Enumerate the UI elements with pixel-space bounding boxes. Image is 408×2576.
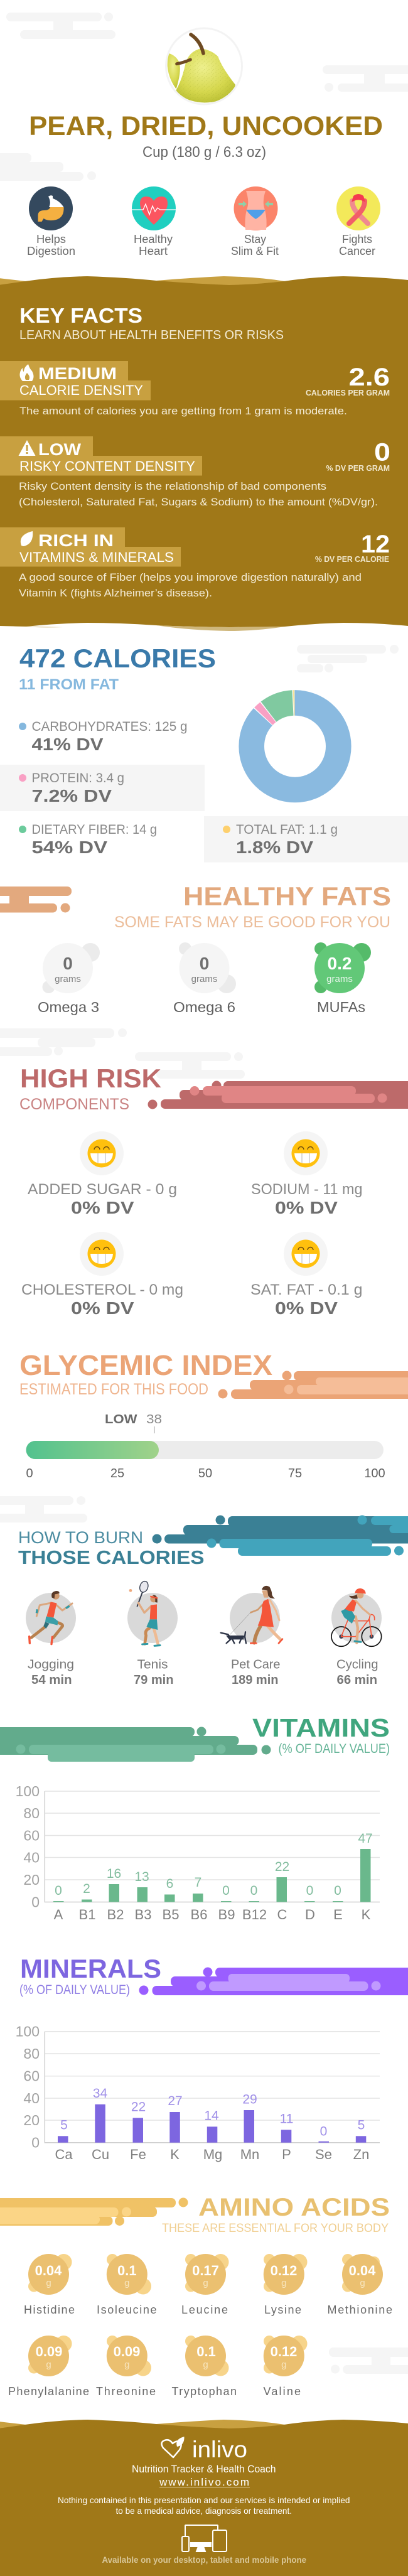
fact: risky content density <box>0 436 390 508</box>
legend: protein: 7.2% DV <box>31 786 112 806</box>
bar chart: minerals: P <box>282 2147 291 2162</box>
risk item: added sugar <box>28 1131 177 1217</box>
subheading: calories from fat: 11 FROM FAT <box>19 676 119 693</box>
background cloud: left <box>0 153 96 181</box>
logo: inlivo <box>161 2437 247 2462</box>
risk item: saturated fat <box>250 1232 363 1318</box>
availability note: Available on your desktop, tablet and mobile phone <box>102 2555 306 2565</box>
bar chart: minerals: 60 <box>23 2068 40 2084</box>
bar chart: minerals <box>16 2024 380 2162</box>
amino acid: valine: g <box>281 2359 286 2370</box>
activity: pet care: 189 min <box>232 1673 279 1687</box>
amino acid: isoleucine: Isoleucine <box>97 2304 157 2316</box>
fact: calorie density: 2.6 <box>349 364 390 391</box>
amino acid: histidine: g <box>46 2278 51 2288</box>
subheading: amino acids: THESE ARE ESSENTIAL FOR YOUR BODY <box>162 2222 389 2235</box>
healthy fat: omega 6 <box>173 942 236 1015</box>
decorative blob: amino acids <box>0 2197 188 2226</box>
bar chart: vitamins: B6 <box>191 1907 207 1922</box>
amino acid: valine: 0.12 <box>271 2344 297 2359</box>
bar chart: vitamins: B5 <box>163 1907 179 1922</box>
bar chart: vitamins: C <box>277 1907 287 1922</box>
fact: rich in vitamins and minerals <box>0 527 390 599</box>
benefit: stay slim and fit <box>231 186 279 257</box>
healthy fat: omega 6: 0 <box>200 954 209 973</box>
food photo: pear <box>166 28 242 104</box>
bar chart: vitamins: E <box>333 1907 343 1922</box>
bar chart: vitamins: 60 <box>23 1827 40 1843</box>
amino acid: threonine: 0.09 <box>114 2344 140 2359</box>
legend: carbohydrates: CARBOHYDRATES: 125 g <box>31 719 187 734</box>
heading: how to burn: HOW TO BURN <box>18 1528 143 1547</box>
activity: jogging: Jogging <box>28 1657 74 1671</box>
legend: total fat <box>204 816 408 863</box>
benefit: stay slim and fit: Stay <box>244 233 266 245</box>
amino acid: methionine: Methionine <box>328 2304 392 2316</box>
bar chart: minerals: 29 <box>242 2093 257 2107</box>
activity: cycling: 66 min <box>336 1673 377 1687</box>
amino acid: methionine: g <box>360 2278 365 2288</box>
bar chart: vitamins: 0 <box>306 1883 313 1898</box>
bar chart: minerals: Zn <box>353 2147 369 2162</box>
decorative blob: vitamins <box>0 1727 271 1762</box>
amino acid: tryptophan: g <box>203 2359 208 2370</box>
bar chart: minerals: 0 <box>31 2135 40 2151</box>
bar chart: minerals: 11 <box>280 2112 293 2126</box>
gauge: glycemic index: 50 <box>198 1467 212 1480</box>
benefit: healthy heart: Heart <box>139 245 168 257</box>
bar chart: vitamins: 0 <box>222 1883 230 1898</box>
amino acid: leucine: 0.17 <box>192 2263 219 2278</box>
amino acid: histidine: Histidine <box>24 2304 75 2316</box>
amino acid: lysine: g <box>281 2278 286 2288</box>
decorative blob: high risk <box>148 1081 408 1109</box>
benefit: fights cancer: Fights <box>342 233 372 245</box>
subheading: minerals: (% OF DAILY VALUE) <box>19 1983 130 1997</box>
activity: pet care <box>221 1586 282 1687</box>
panel: footer <box>0 2420 408 2576</box>
fact: calorie density: MEDIUM <box>38 364 117 383</box>
fact: calorie density: The amount of calories you are getting from 1 gram is moderate. <box>19 405 347 417</box>
heading: key facts: KEY FACTS <box>19 304 142 327</box>
fact: rich in vitamins and minerals: Vitamin K (fights Alzheimer’s disease). <box>19 587 212 599</box>
subheading: key facts: LEARN ABOUT HEALTH BENEFITS OR RISKS <box>19 328 284 342</box>
legend: protein <box>0 765 205 811</box>
bar chart: minerals: 34 <box>93 2086 107 2101</box>
icon: devices <box>182 2525 227 2552</box>
subheading: glycemic index: ESTIMATED FOR THIS FOOD <box>19 1381 208 1398</box>
background cloud: top right <box>323 65 408 92</box>
gauge: glycemic index: 100 <box>364 1467 385 1480</box>
gauge: glycemic index: 0 <box>26 1467 33 1480</box>
amino acid: leucine <box>181 2254 228 2316</box>
healthy fat: omega 3: grams <box>55 974 81 984</box>
healthy fat: omega 3: Omega 3 <box>38 999 99 1015</box>
amino acid: isoleucine: g <box>124 2278 129 2288</box>
risk item: cholesterol <box>21 1232 183 1318</box>
fact: calorie density: CALORIES PER GRAM <box>306 388 390 397</box>
amino acid: lysine <box>264 2254 308 2316</box>
healthy fat: MUFAs: 0.2 <box>328 954 352 973</box>
background cloud: high risk left <box>0 1028 127 1056</box>
bar chart: minerals: 20 <box>23 2112 40 2128</box>
subheading: healthy fats: SOME FATS MAY BE GOOD FOR YOU <box>114 913 390 931</box>
donut chart: calorie sources <box>252 703 338 790</box>
heading: glycemic index: GLYCEMIC INDEX <box>19 1349 272 1381</box>
fact: risky content density: 0 <box>374 438 390 466</box>
benefit: fights cancer <box>336 186 380 257</box>
bar chart: minerals: Mn <box>240 2147 259 2162</box>
activity: pet care: Pet Care <box>231 1657 280 1671</box>
activity: tennis: Tenis <box>137 1657 168 1671</box>
title: PEAR, DRIED, UNCOOKED <box>29 111 383 141</box>
amino acid: lysine: 0.12 <box>271 2263 297 2278</box>
heading: minerals: MINERALS <box>20 1954 161 1983</box>
bar chart: minerals: 5 <box>358 2118 365 2133</box>
healthy fat: omega 6: grams <box>191 974 217 984</box>
background cloud: bottom right <box>329 2347 408 2374</box>
bar chart: vitamins: 22 <box>275 1860 289 1874</box>
gauge: glycemic index <box>26 1413 385 1480</box>
bar chart: vitamins: B3 <box>135 1907 151 1922</box>
activity: cycling: Cycling <box>336 1657 378 1671</box>
heading: amino acids: AMINO ACIDS <box>198 2194 390 2221</box>
bar chart: vitamins: 80 <box>23 1805 40 1821</box>
logo: inlivo: inlivo <box>192 2437 247 2462</box>
bar chart: vitamins: 7 <box>195 1875 201 1890</box>
bar chart: minerals: Mg <box>203 2147 222 2162</box>
benefit: healthy heart: Healthy <box>134 233 173 245</box>
fact: calorie density <box>0 361 390 417</box>
serving size: Cup (180 g / 6.3 oz) <box>142 144 266 161</box>
risk item: sodium: 0% DV <box>275 1198 338 1217</box>
healthy fat: omega 3: 0 <box>63 954 73 973</box>
benefit: healthy heart <box>132 186 176 257</box>
heading: healthy fats: HEALTHY FATS <box>183 881 391 911</box>
bar chart: minerals: 0 <box>320 2125 327 2139</box>
bar chart: minerals: 80 <box>23 2045 40 2062</box>
risk item: saturated fat: 0% DV <box>275 1298 338 1318</box>
bar chart: vitamins: 0 <box>334 1883 341 1898</box>
risk item: saturated fat: SAT. FAT - 0.1 g <box>250 1281 363 1298</box>
activity: tennis: 79 min <box>134 1673 173 1687</box>
panel: key facts <box>0 276 408 631</box>
activity: tennis <box>127 1580 178 1687</box>
benefit: stay slim and fit: Slim & Fit <box>231 245 279 257</box>
bar chart: vitamins: 0 <box>55 1883 62 1898</box>
background cloud: calories <box>297 645 399 672</box>
bar chart: vitamins: B12 <box>242 1907 267 1922</box>
amino acid: tryptophan: Tryptophan <box>172 2385 237 2398</box>
heading: those calories: THOSE CALORIES <box>18 1546 205 1568</box>
fact: risky content density: LOW <box>38 440 82 459</box>
amino acid: isoleucine <box>97 2254 157 2316</box>
amino acid: threonine: g <box>124 2359 129 2370</box>
bar chart: vitamins: B2 <box>107 1907 124 1922</box>
activity: cycling <box>331 1588 382 1687</box>
decorative blob: burn <box>152 1516 408 1556</box>
bar chart: vitamins: B9 <box>218 1907 235 1922</box>
bar chart: vitamins: 0 <box>250 1883 257 1898</box>
risk item: sodium: SODIUM - 11 mg <box>251 1181 363 1198</box>
amino acid: valine: Valine <box>264 2385 301 2398</box>
benefit: helps digestion: Helps <box>36 233 66 245</box>
fact: rich in vitamins and minerals: 12 <box>361 531 390 558</box>
amino acid: leucine: g <box>203 2278 208 2288</box>
healthy fat: omega 6: Omega 6 <box>173 999 235 1015</box>
background cloud: burn <box>0 1496 87 1522</box>
bar chart: minerals: 14 <box>204 2109 219 2123</box>
legend: dietary fiber: DIETARY FIBER: 14 g <box>31 822 157 837</box>
amino acid: phenylalanine <box>8 2336 89 2398</box>
heading: vitamins: VITAMINS <box>252 1713 390 1742</box>
healthy fat: MUFAs: grams <box>326 974 353 984</box>
amino acid: histidine <box>24 2254 75 2316</box>
background cloud: high risk centre <box>135 1052 245 1079</box>
bar chart: minerals: Se <box>315 2147 332 2162</box>
bar chart: vitamins: 40 <box>23 1850 40 1866</box>
bar chart: vitamins: 0 <box>31 1894 40 1910</box>
amino acid: tryptophan <box>172 2336 237 2398</box>
amino acid: phenylalanine: Phenylalanine <box>8 2385 89 2398</box>
background cloud: top left <box>6 13 115 39</box>
bar chart: minerals: Cu <box>92 2147 109 2162</box>
amino acid: threonine <box>96 2336 156 2398</box>
benefit: helps digestion: Digestion <box>27 245 75 257</box>
amino acid: lysine: Lysine <box>264 2304 301 2316</box>
fact: rich in vitamins and minerals: % DV PER CALORIE <box>315 554 389 564</box>
bar chart: vitamins: 20 <box>23 1872 40 1888</box>
fact: rich in vitamins and minerals: RICH IN <box>38 531 114 550</box>
amino acid: tryptophan: 0.1 <box>196 2344 216 2359</box>
fact: risky content density: (Cholesterol, Saturated Fat, Sugars & Sodium) to the amount (%DV/gr). <box>19 496 378 508</box>
bar chart: minerals: Ca <box>55 2147 73 2162</box>
amino acid: leucine: Leucine <box>181 2304 228 2316</box>
gauge: glycemic index: 75 <box>288 1467 302 1480</box>
gauge: glycemic index: 38 <box>146 1413 162 1426</box>
risk item: added sugar: ADDED SUGAR - 0 g <box>28 1181 177 1198</box>
amino acid: threonine: Threonine <box>96 2385 156 2398</box>
bar chart: minerals: 100 <box>16 2024 40 2040</box>
bar chart: vitamins: 16 <box>107 1867 121 1881</box>
fact: risky content density: Risky Content density is the relationship of bad components <box>19 480 326 492</box>
bar chart: vitamins: D <box>305 1907 315 1922</box>
decorative blob: healthy fats <box>0 887 72 913</box>
decorative blob: minerals <box>139 1968 408 1995</box>
fact: rich in vitamins and minerals: A good source of Fiber (helps you improve digestion naturally) and <box>19 571 362 583</box>
gauge: glycemic index: LOW <box>105 1413 137 1426</box>
tagline: Nutrition Tracker & Health Coach <box>132 2463 276 2475</box>
legend: carbohydrates: 41% DV <box>31 735 104 754</box>
bar chart: vitamins: 100 <box>16 1783 40 1799</box>
bar chart: vitamins: 6 <box>166 1877 173 1891</box>
risk item: added sugar: 0% DV <box>71 1198 134 1217</box>
risk item: cholesterol: 0% DV <box>71 1298 134 1318</box>
benefit: helps digestion <box>27 186 75 257</box>
bar chart: minerals: 5 <box>60 2118 68 2133</box>
risk item: sodium <box>251 1131 363 1217</box>
heading: high risk: HIGH RISK <box>20 1064 161 1093</box>
bar chart: vitamins: 47 <box>358 1831 373 1846</box>
healthy fat: omega 3 <box>38 943 100 1015</box>
healthy fat: MUFAs <box>314 942 371 1015</box>
activity: jogging <box>26 1591 76 1687</box>
subheading: vitamins: (% OF DAILY VALUE) <box>279 1742 390 1756</box>
amino acid: methionine: 0.04 <box>349 2263 376 2278</box>
bar chart: minerals: 40 <box>23 2090 40 2106</box>
fact: risky content density: % DV PER GRAM <box>326 463 390 473</box>
bar chart: minerals: 22 <box>131 2100 146 2115</box>
amino acid: phenylalanine: 0.09 <box>36 2344 62 2359</box>
amino acid: isoleucine: 0.1 <box>117 2263 137 2278</box>
fact: rich in vitamins and minerals: VITAMINS & MINERALS <box>19 549 174 565</box>
bar chart: vitamins: B1 <box>79 1907 95 1922</box>
legend: total fat: 1.8% DV <box>236 838 313 857</box>
amino acid: histidine: 0.04 <box>35 2263 62 2278</box>
amino acid: phenylalanine: g <box>46 2359 51 2370</box>
bar chart: minerals: Fe <box>130 2147 146 2162</box>
healthy fat: MUFAs: MUFAs <box>317 999 365 1015</box>
legend: protein: PROTEIN: 3.4 g <box>31 771 124 785</box>
legend: total fat: TOTAL FAT: 1.1 g <box>236 822 338 837</box>
activity: jogging: 54 min <box>31 1673 72 1687</box>
fact: risky content density: RISKY CONTENT DENSITY <box>19 458 195 474</box>
gauge: glycemic index: 25 <box>110 1467 124 1480</box>
bar chart: minerals: K <box>170 2147 180 2162</box>
benefit: fights cancer: Cancer <box>339 245 375 257</box>
bar chart: vitamins <box>16 1783 380 1922</box>
disclaimer: Nothing contained in this presentation and our services is intended or implied <box>58 2495 350 2505</box>
decorative blob: glycemic index <box>218 1371 408 1399</box>
fact: calorie density: CALORIE DENSITY <box>19 382 143 398</box>
bar chart: minerals: 27 <box>168 2094 183 2108</box>
legend: carbohydrates <box>19 719 187 754</box>
bar chart: vitamins: A <box>54 1907 63 1922</box>
heading: calories: 472 CALORIES <box>19 644 216 673</box>
legend: dietary fiber: 54% DV <box>31 838 107 857</box>
risk item: cholesterol: CHOLESTEROL - 0 mg <box>21 1281 183 1298</box>
bar chart: vitamins: K <box>362 1907 371 1922</box>
disclaimer: to be a medical advice, diagnosis or treatment. <box>115 2506 292 2516</box>
amino acid: valine <box>264 2336 308 2398</box>
bar chart: vitamins: 13 <box>134 1870 149 1884</box>
legend: dietary fiber <box>19 822 157 857</box>
bar chart: vitamins: 2 <box>83 1882 90 1896</box>
website link: www.inlivo.com <box>159 2476 249 2488</box>
disclaimer <box>58 2495 350 2516</box>
subheading: components: COMPONENTS <box>19 1096 129 1113</box>
amino acid: methionine <box>328 2254 392 2316</box>
